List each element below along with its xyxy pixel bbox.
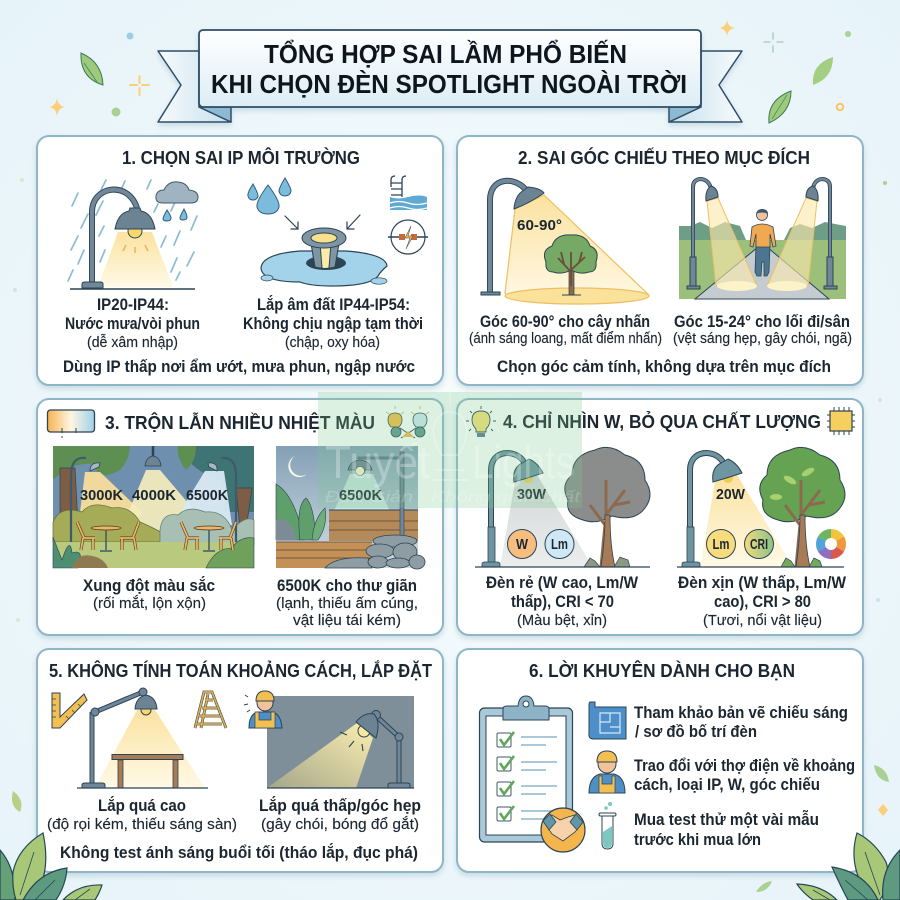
wattage label: 20W <box>716 487 745 503</box>
advice 2 text <box>634 757 855 794</box>
advice 3 text: Mua test thử một vài mẫu <box>634 810 819 829</box>
panel 5: distance and installation <box>37 649 443 872</box>
colour wheel <box>816 529 846 559</box>
temperature labels <box>80 488 229 504</box>
watermark <box>318 392 582 508</box>
illustration: cheap lamp <box>475 447 650 567</box>
illustration: quality lamp <box>677 447 846 567</box>
icon: electrician <box>589 751 625 793</box>
caption: too low <box>259 796 421 833</box>
caption: colour conflict <box>83 576 215 612</box>
heading 6: 6. LỜI KHUYÊN DÀNH CHO BẠN <box>529 660 795 681</box>
caption: too low: (gây chói, bóng đổ gắt) <box>261 816 419 833</box>
watermark: Đơn Giản - Không gian chất <box>325 489 581 506</box>
icon: worker with helmet <box>244 691 282 728</box>
panel 1: wrong IP <box>37 136 443 385</box>
advice 3 text: trước khi mua lớn <box>634 831 761 849</box>
advice 1 text: Tham khảo bản vẽ chiếu sáng <box>634 704 848 722</box>
wattage label: 30W <box>517 487 546 503</box>
caption: quality lamp: (Tươi, nổi vật liệu) <box>703 613 822 629</box>
temperature label: 6500K <box>339 488 383 504</box>
badge: Lm: Lm <box>712 537 730 553</box>
beam label: 60-90° <box>517 218 562 234</box>
caption: IP20-IP44 <box>65 296 200 351</box>
heading 1: 1. CHỌN SAI IP MÔI TRƯỜNG <box>122 147 360 168</box>
caption: in-ground IP44-IP54: Không chịu ngập tạm thời <box>243 315 423 333</box>
tables and chairs <box>77 522 236 551</box>
title text <box>211 39 687 99</box>
caption: colour conflict: Xung đột màu sắc <box>83 576 215 595</box>
icon: set square ruler <box>52 693 87 728</box>
heading 4: 4. CHỈ NHÌN W, BỎ QUA CHẤT LƯỢNG <box>503 411 821 432</box>
caption: IP20-IP44: (dễ xâm nhập) <box>87 334 178 351</box>
panel 4: only looking at watts <box>457 399 863 635</box>
caption: 60-90 degrees <box>469 313 662 347</box>
caption: colour conflict: (rối mắt, lộn xộn) <box>93 595 206 612</box>
icon: handshake badge <box>541 808 585 852</box>
summary 1: Dùng IP thấp nơi ẩm ướt, mưa phun, ngập nước <box>63 358 415 376</box>
illustration: narrow beams over path <box>679 179 846 299</box>
illustration: checklist clipboard <box>480 696 572 842</box>
badge: Lm <box>545 530 574 558</box>
caption: 60-90 degrees: (ánh sáng loang, mất điểm nhấn) <box>469 331 662 347</box>
temperature labels: 4000K <box>132 488 177 504</box>
advice 3 text <box>634 810 819 849</box>
watermark: Lights <box>472 436 575 488</box>
caption: quality lamp: Đèn xịn (W thấp, Lm/W <box>678 574 846 592</box>
panel 3: mixed colour temperatures <box>37 399 443 635</box>
heading 5: 5. KHÔNG TÍNH TOÁN KHOẢNG CÁCH, LẮP ĐẶT <box>49 660 433 681</box>
illustration: in-ground light flooded <box>248 178 387 286</box>
illustration: cold night patio <box>276 446 425 569</box>
illustration: wide beam on tree <box>481 181 649 304</box>
illustration: lamp mounted too low <box>267 696 414 788</box>
title ribbon <box>158 30 742 122</box>
caption: IP20-IP44: Nước mưa/vòi phun <box>65 315 200 333</box>
illustration: lamp mounted too high <box>77 688 208 788</box>
caption: in-ground IP44-IP54 <box>243 295 423 351</box>
watermark: Tuyết <box>325 436 430 488</box>
caption: quality lamp <box>678 574 846 629</box>
badge: CRI: CRI <box>750 537 768 553</box>
caption: cheap lamp: (Màu bệt, xỉn) <box>517 613 607 629</box>
caption: 6500K relaxation: vật liệu tái kém) <box>293 613 401 629</box>
temperature labels: 3000K <box>80 488 124 504</box>
badge: W <box>508 530 536 558</box>
badge: W: W <box>516 537 528 553</box>
icon: swimming pool <box>390 176 427 210</box>
badge: Lm <box>706 530 736 558</box>
plant: bottom right corner <box>797 833 900 900</box>
illustration: garden with mixed lights <box>53 446 254 568</box>
caption: in-ground IP44-IP54: Lắp âm đất IP44-IP54: <box>257 295 410 314</box>
caption: 15-24 degrees <box>673 313 852 347</box>
caption: too high: (độ rọi kém, thiếu sáng sàn) <box>47 817 237 833</box>
icon: colour temperature scale <box>48 410 94 437</box>
temperature labels: 6500K <box>186 488 229 504</box>
badge: CRI <box>744 530 774 558</box>
green tree <box>760 447 845 567</box>
caption: too high <box>47 796 237 833</box>
caption: cheap lamp <box>486 574 638 629</box>
icon: chip <box>827 407 855 435</box>
caption: 6500K relaxation: (lạnh, thiếu ấm cúng, <box>276 596 418 612</box>
icon: two bulbs <box>386 406 429 438</box>
advice 2 text: Trao đổi với thợ điện về khoảng <box>634 757 855 775</box>
illustration: street lamp in rain <box>68 180 198 289</box>
panel 2: wrong beam angle <box>457 136 863 385</box>
heading 3: 3. TRỘN LẪN NHIỀU NHIỆT MÀU <box>105 412 375 433</box>
caption: too low: Lắp quá thấp/góc hẹp <box>259 796 421 815</box>
caption: cheap lamp: Đèn rẻ (W cao, Lm/W <box>486 574 638 592</box>
plant: bottom left corner <box>0 833 102 900</box>
caption: IP20-IP44: IP20-IP44: <box>97 296 169 314</box>
icon: light bulb <box>466 406 496 437</box>
caption: 60-90 degrees: Góc 60-90° cho cây nhấn <box>480 313 650 331</box>
badge: Lm: Lm <box>551 537 568 553</box>
summary 2: Chọn góc cảm tính, không dựa trên mục đích <box>497 358 831 376</box>
walking person <box>750 209 776 276</box>
caption: cheap lamp: thấp), CRI < 70 <box>511 593 614 611</box>
advice 2 text: cách, loại IP, W, góc chiếu <box>634 776 820 794</box>
advice 1 text <box>634 704 848 741</box>
caption: in-ground IP44-IP54: (chập, oxy hóa) <box>285 335 380 351</box>
caption: quality lamp: cao), CRI > 80 <box>714 593 811 611</box>
caption: too high: Lắp quá cao <box>98 796 186 815</box>
caption: 6500K relaxation: 6500K cho thư giãn <box>277 577 417 595</box>
icon: test tube <box>599 802 616 849</box>
caption: 6500K relaxation <box>276 577 418 629</box>
grey tree <box>565 447 650 567</box>
caption: 15-24 degrees: Góc 15-24° cho lối đi/sân <box>674 313 850 331</box>
panel 6: advice <box>457 649 863 872</box>
icon: ladder <box>195 692 226 728</box>
advice 1 text: / sơ đồ bố trí đèn <box>635 723 757 741</box>
summary 5: Không test ánh sáng buổi tối (tháo lắp, đục phá) <box>60 843 418 862</box>
heading 2: 2. SAI GÓC CHIẾU THEO MỤC ĐÍCH <box>518 147 810 168</box>
icon: blueprint <box>589 702 626 739</box>
caption: 15-24 degrees: (vệt sáng hẹp, gây chói, ngã) <box>673 331 852 347</box>
icon: short circuit <box>388 220 428 254</box>
title text: TỔNG HỢP SAI LẦM PHỔ BIẾN <box>264 39 627 69</box>
title text: KHI CHỌN ĐÈN SPOTLIGHT NGOÀI TRỜI <box>211 69 687 99</box>
